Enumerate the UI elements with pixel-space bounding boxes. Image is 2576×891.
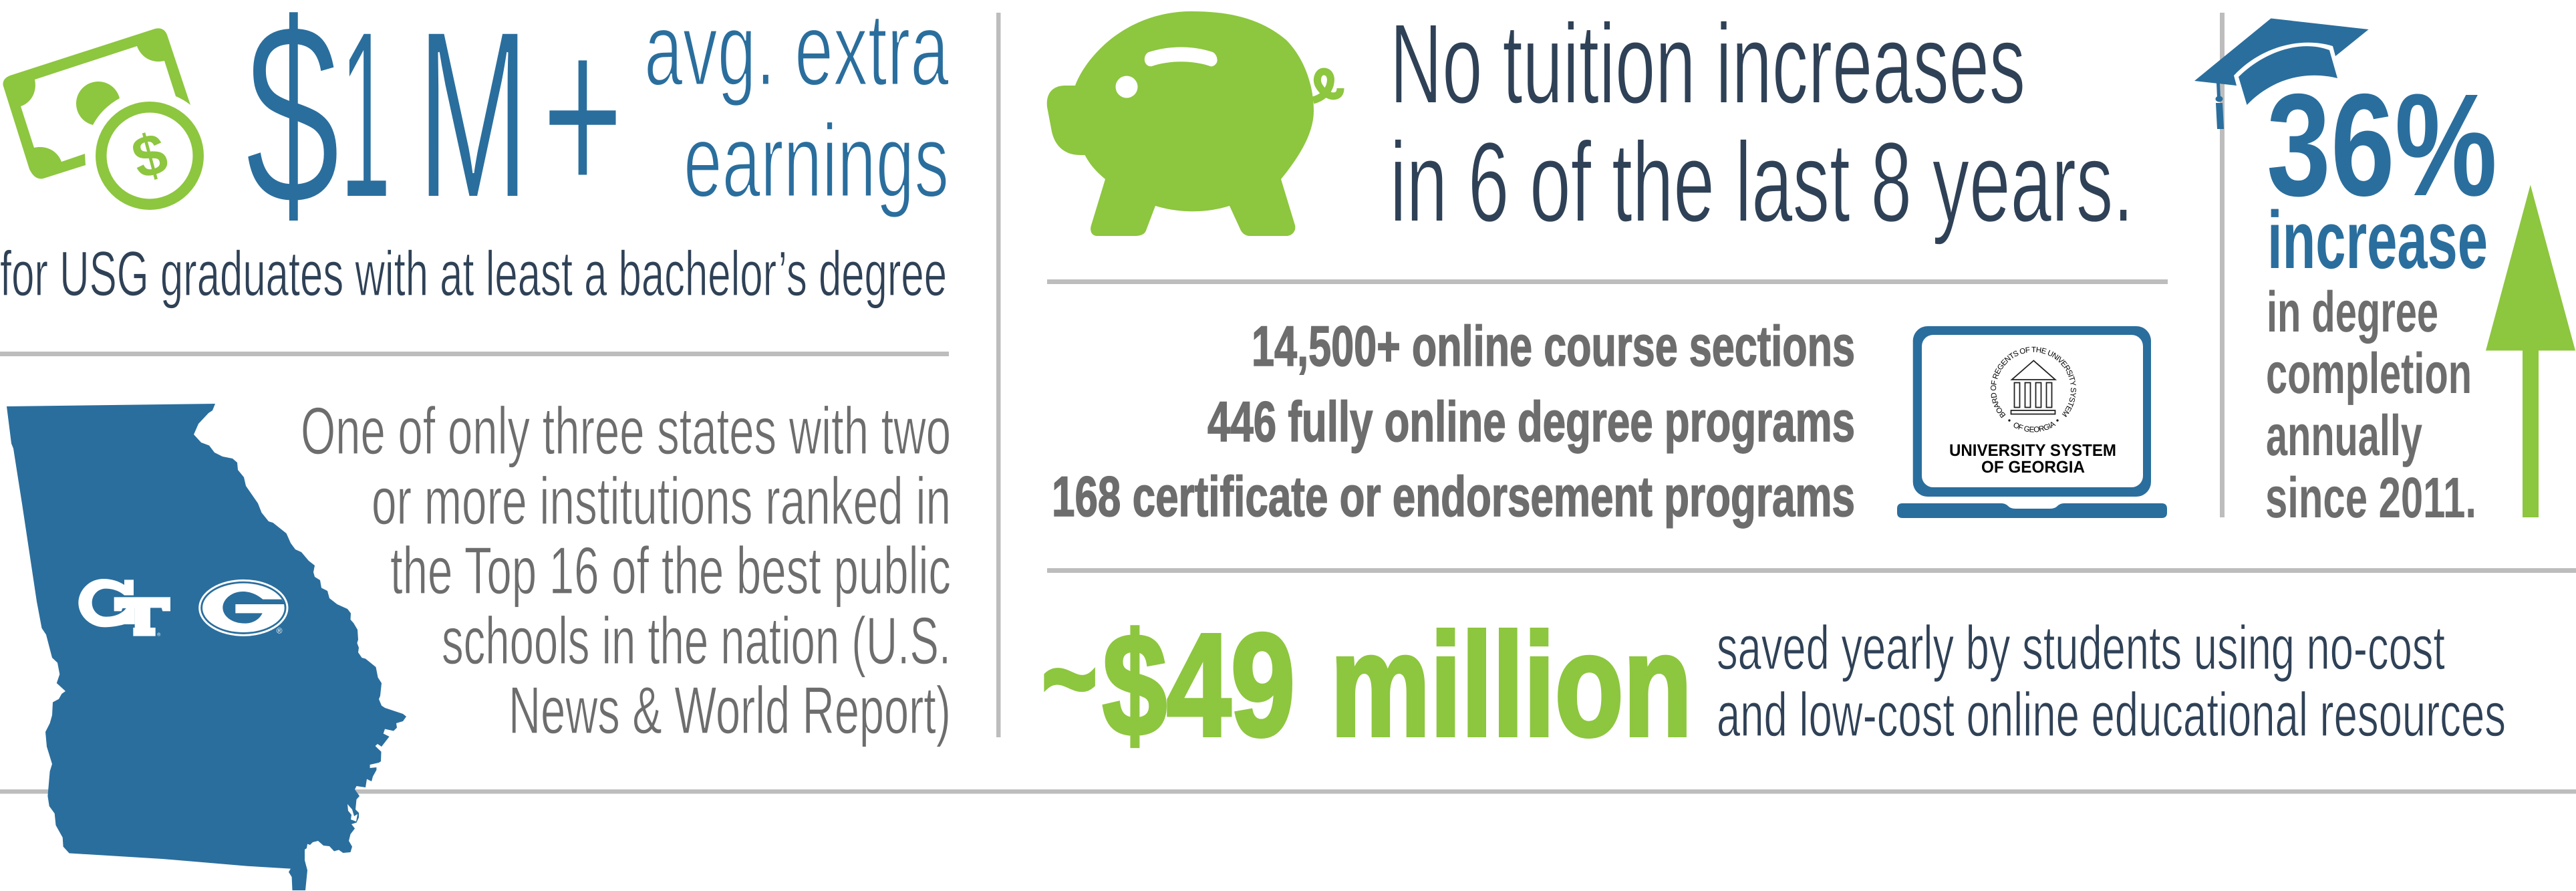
logo: University of Georgia G — [200, 580, 287, 635]
map: Georgia — [7, 404, 406, 890]
big stat: ~$49 million — [1042, 604, 1692, 767]
text: one of only three states — [301, 394, 951, 748]
text: avg. extra earnings — [644, 0, 950, 219]
text: one of only three states: One of only three states with two — [301, 394, 951, 469]
icon: piggy bank — [1047, 11, 1340, 236]
big stat: 36% increase — [2267, 64, 2497, 285]
text: one of only three states: or more institutions ranked in — [372, 464, 951, 539]
icon: money bill and coin — [3, 28, 198, 205]
logo: Georgia Tech GT — [78, 579, 170, 637]
headline: no tuition increases — [1390, 1, 2134, 246]
text: in degree completion annually since 2011: in degree — [2267, 280, 2438, 344]
text: online programs list — [1052, 315, 1855, 529]
icon: graduation cap — [2194, 19, 2369, 129]
arrow: upward — [2486, 184, 2575, 517]
text: one of only three states: the Top 16 of the best public — [390, 533, 951, 608]
big stat: 36% increase: 36% — [2267, 64, 2497, 227]
text: in degree completion annually since 2011: completion — [2266, 342, 2472, 406]
big stat: ~$49 million: ~ — [1042, 608, 1097, 749]
text: avg. extra earnings: earnings — [684, 103, 949, 219]
big stat: ~$49 million: $49 — [1103, 604, 1295, 767]
headline: no tuition increases: No tuition increases — [1390, 1, 2025, 128]
text: one of only three states: News & World Report) — [509, 673, 951, 748]
text: saved yearly — [1717, 613, 2506, 749]
icon: money bill and coin: $ — [125, 119, 174, 192]
headline: no tuition increases: in 6 of the last 8 years. — [1390, 119, 2134, 246]
logo: Georgia Tech GT: ® — [157, 632, 160, 637]
text: in degree completion annually since 2011: since 2011. — [2265, 466, 2476, 530]
text: one of only three states: schools in the nation (U.S. — [442, 604, 951, 678]
text: in degree completion annually since 2011: annually — [2266, 404, 2422, 468]
text: online programs list: 14,500+ online course sections — [1252, 315, 1855, 378]
text: in degree completion annually since 2011 — [2265, 280, 2476, 530]
big stat: ~$49 million: million — [1330, 604, 1692, 767]
icon: laptop with USG seal: OF GEORGIA — [1981, 458, 2085, 477]
big stat: $1M+ — [245, 0, 623, 259]
icon: laptop with USG seal: OF GEORGIA — [2014, 422, 2055, 432]
icon: laptop with USG seal: UNIVERSITY SYSTEM — [1949, 441, 2116, 460]
icon: laptop with USG seal: BOARD OF REGENTS OF THE UNIVERSITY SYSTEM — [1991, 346, 2076, 418]
text: online programs list: 446 fully online degree programs — [1207, 390, 1855, 454]
logo: University of Georgia G: ® — [277, 626, 282, 635]
text: for USG graduates: for USG graduates with at least a bachelor’s degree — [0, 239, 947, 309]
icon: laptop with USG seal — [1897, 326, 2167, 518]
text: online programs list: 168 certificate or endorsement programs — [1052, 465, 1855, 529]
